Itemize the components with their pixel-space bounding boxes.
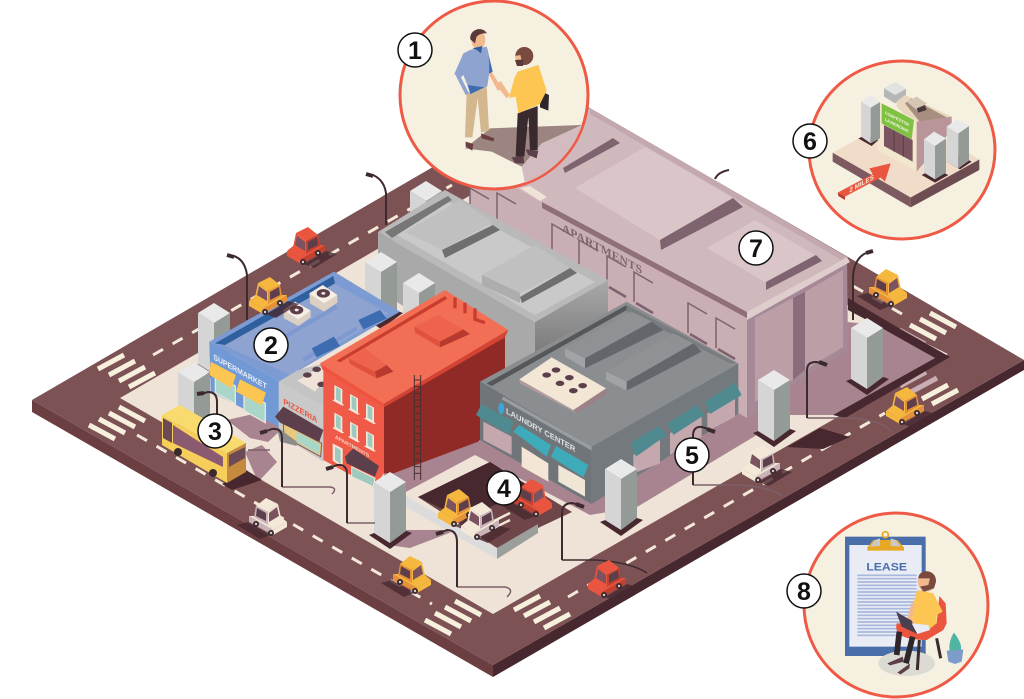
shop windows xyxy=(483,422,512,455)
sign: supermarket: SUPERMARKET xyxy=(213,352,267,391)
red awning xyxy=(345,448,379,477)
car: yellow E road xyxy=(886,387,936,428)
man in blue shirt xyxy=(454,29,502,151)
sign: apartments: APARTMENTS xyxy=(562,221,642,277)
lamp: NW road 1 xyxy=(227,255,247,320)
lamp: behind apartments xyxy=(715,170,729,179)
car: cream SE road xyxy=(742,445,792,486)
pizzeria awning xyxy=(275,407,323,442)
car: cream parked xyxy=(461,502,511,543)
number badge 8: 8 xyxy=(797,578,811,606)
number badge 2: 2 xyxy=(264,332,278,360)
road surface xyxy=(32,92,1024,665)
zebra crossing E bottom xyxy=(900,372,958,404)
roof block 2 xyxy=(606,333,702,391)
tower: rear 2 xyxy=(360,252,403,329)
number badge 2 xyxy=(254,328,288,362)
awning: front 3 xyxy=(551,446,588,477)
roof vent bars xyxy=(312,337,340,357)
tower: rear 1 xyxy=(405,181,448,258)
number badge 8 xyxy=(787,574,821,608)
red chimneys xyxy=(455,297,485,323)
car: yellow SW road xyxy=(381,556,431,597)
zebra crossing S left xyxy=(425,601,481,634)
tower: plaza xyxy=(753,370,796,447)
tower: left rear xyxy=(193,303,236,380)
raised panel A xyxy=(405,200,493,250)
AC pad xyxy=(519,357,607,413)
right side windows xyxy=(633,440,660,473)
lamp posts xyxy=(201,362,823,587)
roof panel small xyxy=(707,220,815,282)
person shadow xyxy=(878,651,935,676)
lamp: NW road 2 xyxy=(366,174,386,225)
distance label: 2 MILES xyxy=(849,173,874,195)
tower right rear xyxy=(947,119,972,169)
awning: front 2 xyxy=(513,425,551,457)
car: cream SW road xyxy=(237,498,287,539)
building: grey warehouse xyxy=(378,190,608,390)
potted plant xyxy=(947,633,963,664)
car: yellow parked xyxy=(438,489,488,530)
low parking wall xyxy=(406,496,538,559)
roof panel large xyxy=(575,147,733,240)
bus xyxy=(162,405,262,490)
laundry door xyxy=(522,447,548,482)
tower shadow on road xyxy=(787,428,850,449)
laundromat sign text: LAUNDROMAT xyxy=(885,117,909,134)
roof bar xyxy=(563,138,620,173)
building: supermarket xyxy=(209,272,400,427)
number badge 5 xyxy=(675,438,709,472)
sign: laundry center: LAUNDRY CENTER xyxy=(506,406,576,454)
awning: side 3 xyxy=(705,383,742,414)
number badge 4 xyxy=(487,471,521,505)
sign: apartments small: APARTMENTS xyxy=(335,435,369,459)
building roof xyxy=(897,95,952,133)
number badge 7: 7 xyxy=(749,235,763,263)
red roof block 1 xyxy=(348,348,387,372)
building: laundry center xyxy=(476,302,742,504)
number badge 1: 1 xyxy=(408,37,422,65)
awning: side 1 xyxy=(631,426,667,457)
roof block 1 xyxy=(565,312,663,368)
zebra crossing E top xyxy=(899,313,956,344)
tower: laundry corner xyxy=(600,459,643,536)
awning: side 2 xyxy=(668,405,704,435)
tower: red building corner xyxy=(369,472,412,549)
callout circle 8: lease xyxy=(804,513,988,697)
zebra crossing S right xyxy=(514,596,570,628)
floor shadow xyxy=(465,125,582,167)
callout circle 1: handshake xyxy=(400,1,602,200)
green sign xyxy=(882,103,914,139)
clip xyxy=(867,532,904,551)
tower right front xyxy=(922,132,948,183)
building: apartments xyxy=(470,108,850,420)
car: yellow NE road xyxy=(857,269,907,310)
car: red S road xyxy=(588,560,638,601)
lease heading: LEASE xyxy=(866,562,907,574)
building: pizzeria xyxy=(275,360,337,462)
apartment windows xyxy=(470,188,489,229)
platform xyxy=(833,115,979,207)
tower left xyxy=(858,95,880,146)
number badge 6: 6 xyxy=(803,128,817,156)
rear grey box xyxy=(884,82,906,103)
street lamps front row xyxy=(197,362,892,597)
man in yellow shirt xyxy=(495,47,549,163)
awning 2 xyxy=(236,379,266,405)
clipboard xyxy=(845,532,926,656)
laundry logo xyxy=(498,403,504,414)
AC unit 2 xyxy=(309,285,337,312)
tower: rear 3 xyxy=(398,273,441,350)
arrow xyxy=(838,163,891,200)
facade xyxy=(877,102,917,172)
car: red parked xyxy=(502,479,552,520)
competitor sign text: COMPETITOR xyxy=(885,110,910,128)
number badge 7 xyxy=(739,231,773,265)
AC units on pizzeria xyxy=(297,366,328,392)
road centre dashes xyxy=(137,185,902,604)
supermarket windows xyxy=(215,375,235,404)
raised panel B xyxy=(482,245,570,293)
red lower window xyxy=(352,467,375,487)
callout circle 6: competitor laundromat xyxy=(809,61,995,239)
number badge 3: 3 xyxy=(208,418,222,446)
sidewalk xyxy=(120,155,948,614)
lilac plaza ground xyxy=(383,300,935,515)
lamp shadows xyxy=(248,418,892,597)
zebra crossing NW xyxy=(98,355,155,387)
lamp: NE road xyxy=(853,251,873,320)
red door xyxy=(333,443,343,467)
building: red apartments xyxy=(320,290,508,487)
number badge 6 xyxy=(793,124,827,158)
number badge 1 xyxy=(398,33,432,67)
zebra crossing W xyxy=(89,407,145,439)
shadows on sidewalk xyxy=(227,412,457,548)
red roof block 2 xyxy=(414,315,463,342)
awning 1 xyxy=(209,362,236,388)
AC unit 1 xyxy=(283,302,311,326)
awning: front 1 xyxy=(476,404,513,435)
number badge 4: 4 xyxy=(497,475,511,503)
number badge 5: 5 xyxy=(685,442,699,470)
tower: right xyxy=(846,318,889,395)
car: yellow NW road xyxy=(249,277,299,318)
armchair xyxy=(896,596,947,670)
car: red NW road xyxy=(287,227,337,268)
road shadow band east xyxy=(833,298,950,418)
roof floor xyxy=(522,124,582,183)
pizzeria shop front xyxy=(283,423,322,457)
sign: pizzeria: PIZZERIA xyxy=(283,397,318,425)
tower: left front xyxy=(173,362,216,439)
number badge 3 xyxy=(198,414,232,448)
lamp heads xyxy=(197,362,827,534)
facade windows xyxy=(332,385,344,406)
lease body lines xyxy=(857,575,917,635)
fire ladder xyxy=(414,375,421,480)
person with laptop xyxy=(887,571,943,674)
parking lot xyxy=(406,462,572,559)
